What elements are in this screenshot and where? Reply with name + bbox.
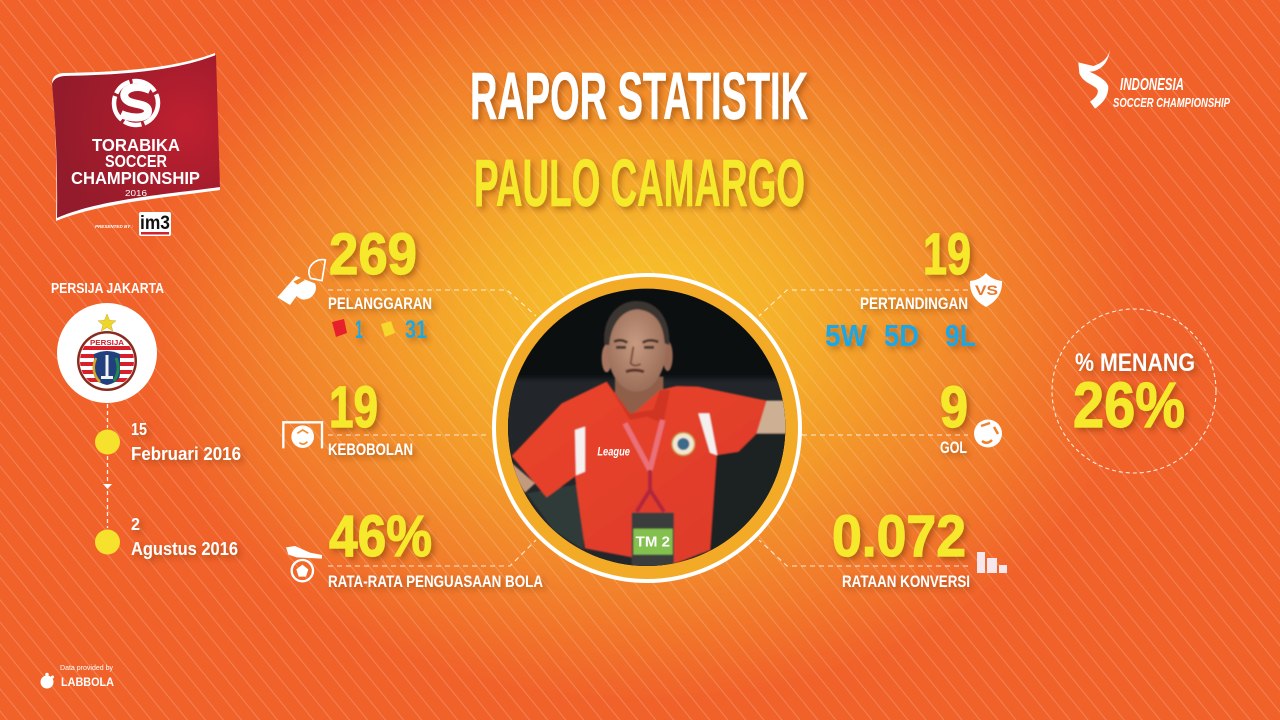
timeline end dot <box>95 530 120 554</box>
icon: vs shield <box>970 273 1002 307</box>
club crest: PERSIJA <box>90 338 124 347</box>
stat: fouls: 31 <box>405 316 427 344</box>
label: KEBOBOLAN <box>328 441 413 459</box>
stat: goals conceded <box>283 375 413 459</box>
label: PERTANDINGAN <box>860 294 968 313</box>
logo: Indonesia Soccer Championship: SOCCER CHAMPIONSHIP <box>1113 96 1230 110</box>
value: 269 <box>329 222 417 287</box>
coach photo <box>494 275 800 581</box>
logo wordmark: TORABIKA <box>92 135 180 155</box>
value: 19 <box>923 222 971 287</box>
stat: conversion rate <box>832 504 1007 591</box>
logo wordmark <box>71 135 200 229</box>
club name: PERSIJA JAKARTA <box>51 281 164 297</box>
label: RATA-RATA PENGUASAAN BOLA <box>328 572 543 591</box>
logo: Indonesia Soccer Championship <box>1078 49 1230 110</box>
value: 19 <box>329 375 378 440</box>
stat: ball possession <box>286 504 543 591</box>
icon: yellow card <box>381 321 395 337</box>
icon: vs shield: VS <box>975 282 998 298</box>
logo wordmark: PRESENTED BY : <box>95 224 133 229</box>
icon: bar chart <box>977 552 1007 573</box>
timeline dates: 15 <box>131 419 147 439</box>
ball emblem <box>114 81 158 125</box>
label: % MENANG <box>1075 349 1195 377</box>
label: PELANGGARAN <box>328 294 432 313</box>
logo: Torabika Soccer Championship <box>52 53 220 236</box>
icon: red card <box>332 319 347 337</box>
win draw loss record <box>825 318 976 353</box>
logo: Indonesia Soccer Championship: INDONESIA <box>1120 74 1184 94</box>
win percentage callout <box>1052 309 1216 473</box>
value: 26% <box>1073 369 1185 441</box>
stat: goals scored <box>940 375 1002 457</box>
shirt brand: League <box>597 444 630 458</box>
S ribbon mark <box>1078 49 1110 109</box>
timeline dates: Februari 2016 <box>131 443 241 464</box>
win draw loss record: 5W <box>825 318 868 353</box>
win draw loss record: 9L <box>945 318 976 353</box>
icon: Labbola ball <box>40 673 54 688</box>
logo wordmark: CHAMPIONSHIP <box>71 168 200 188</box>
data credit: LABBOLA <box>61 677 114 689</box>
logo wordmark: SOCCER <box>105 151 167 171</box>
stat: matches <box>825 222 1002 353</box>
sponsor mark: im3 <box>140 213 170 234</box>
card counts: 1 <box>355 316 363 344</box>
label: GOL <box>940 439 967 457</box>
logo wordmark: 2016 <box>125 188 147 198</box>
timeline dates: 2 <box>131 514 140 534</box>
timeline connector <box>106 404 108 528</box>
club crest <box>57 303 157 403</box>
dashed leader lines <box>328 290 968 566</box>
value: 9 <box>940 375 968 440</box>
club panel: Persija Jakarta <box>51 281 241 559</box>
coach name: PAULO CAMARGO <box>474 146 805 221</box>
icon: goal net and ball <box>283 422 322 448</box>
data credit: Data provided by <box>60 665 113 672</box>
data credit <box>40 665 114 689</box>
icon: boot and ball <box>286 546 322 581</box>
icon: whistle <box>277 260 325 305</box>
value: 46% <box>329 504 432 569</box>
title <box>470 59 808 221</box>
win draw loss record: 5D <box>884 318 919 353</box>
value: 0.072 <box>832 504 966 569</box>
timeline dates <box>131 419 241 559</box>
title: RAPOR STATISTIK <box>470 59 808 134</box>
label: RATAAN KONVERSI <box>842 572 970 591</box>
timeline dates: Agustus 2016 <box>131 538 238 559</box>
timeline start dot <box>95 430 120 454</box>
accreditation text: TM 2 <box>636 535 670 551</box>
timeline arrow <box>103 484 112 489</box>
icon: ball <box>974 420 1002 448</box>
stat: fouls <box>277 222 432 344</box>
